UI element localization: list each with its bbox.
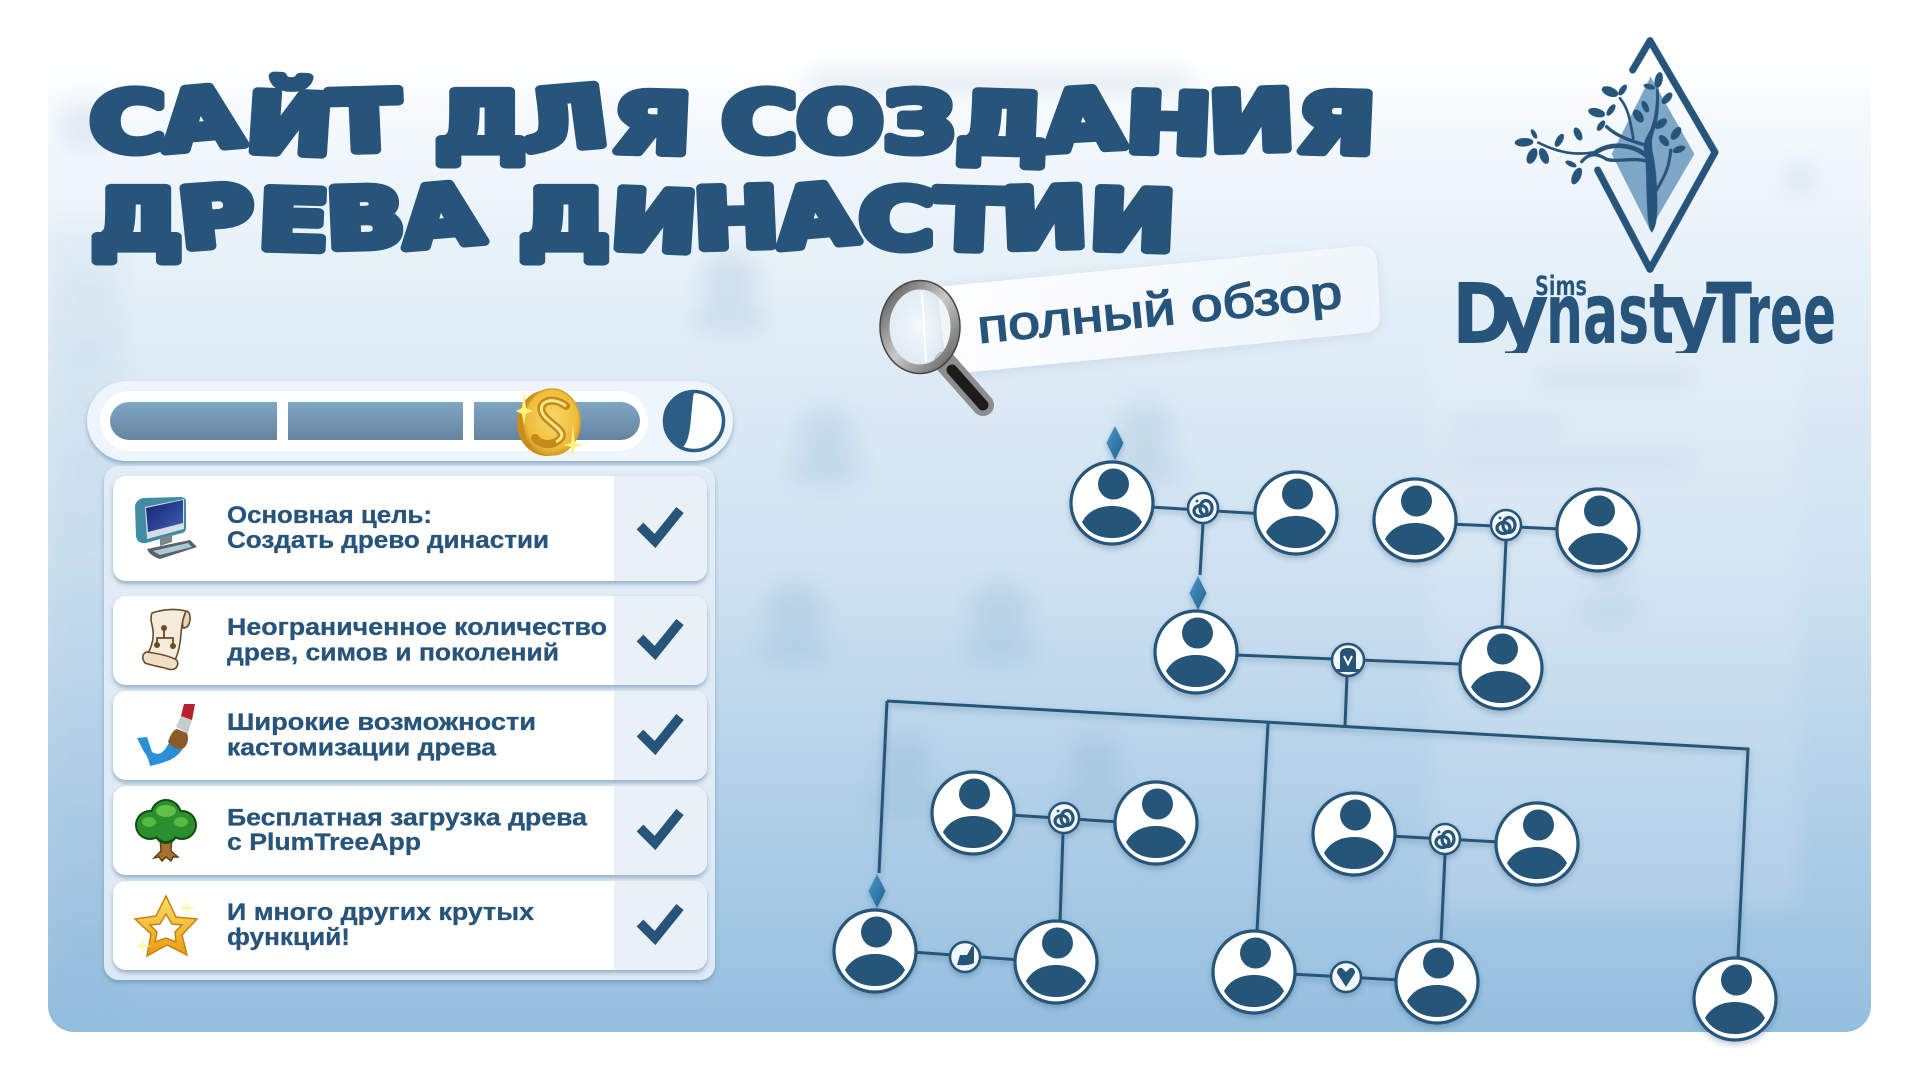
icon: scroll (143, 609, 190, 670)
card text (227, 614, 607, 666)
card text (227, 804, 588, 856)
title: САЙТ (90, 68, 402, 175)
card text: функций! (227, 924, 350, 951)
progress segments (110, 402, 640, 440)
logo wordmark: T (1706, 265, 1752, 363)
connector lines (879, 507, 1748, 980)
icon: check (640, 717, 680, 748)
logo wordmark: y (1668, 265, 1718, 363)
card text (227, 899, 535, 951)
icon: check (640, 510, 680, 541)
subtitle ribbon (937, 246, 1380, 373)
card text: Неограниченное количество (227, 614, 607, 641)
icon: gold star (135, 896, 197, 956)
logo (1452, 41, 1836, 363)
card: free download (113, 786, 707, 875)
logo wordmark: y (1497, 265, 1549, 363)
title: ДЛЯ (435, 68, 693, 174)
icon: check (640, 622, 680, 653)
icon: magnifying glass (880, 280, 983, 405)
icon: check (640, 907, 680, 938)
icon: check (640, 812, 680, 843)
icon: gold coin (516, 389, 584, 456)
card text: Широкие возможности (227, 709, 536, 736)
logo wordmark: Sims (1535, 271, 1587, 302)
title: ДИНАСТИИ (519, 165, 1177, 272)
logo wordmark: ree (1746, 265, 1836, 363)
subtitle text: полный обзор (975, 264, 1344, 353)
heir gems (868, 426, 1206, 908)
card text: древ, симов и поколений (227, 640, 559, 666)
card text: Основная цель: (227, 502, 432, 529)
generation 2 (1155, 611, 1542, 709)
title: СОЗДАНИЯ (722, 71, 1377, 174)
title: ДРЕВА (91, 165, 487, 270)
icon: paint brush (137, 704, 195, 766)
card: customization (113, 691, 707, 780)
logo emblem (1514, 41, 1715, 269)
card text (227, 709, 536, 762)
card text: Создать древо династии (227, 527, 549, 554)
card text: И много других крутых (227, 899, 535, 926)
card text: кастомизации древа (227, 734, 497, 762)
generation 4 (834, 910, 1776, 1040)
logo wordmark (1458, 274, 1834, 353)
card text: Бесплатная загрузка древа (227, 804, 588, 832)
logo wordmark: D (1452, 265, 1512, 363)
icon: computer (135, 497, 197, 559)
generation 1 (1071, 462, 1639, 571)
panel: feature list (104, 466, 715, 980)
card text: с PlumTreeApp (227, 829, 421, 856)
generation 3 (932, 772, 1578, 885)
logo wordmark: nast (1546, 265, 1674, 363)
icon: tree (135, 799, 197, 861)
progress bar panel (87, 381, 733, 461)
family tree chart (834, 426, 1776, 1040)
title (90, 68, 1377, 272)
card text (227, 502, 549, 554)
card: unlimited trees (113, 596, 707, 685)
icon: day timer (663, 392, 724, 450)
card: main goal (113, 476, 707, 581)
card: more features (113, 881, 707, 970)
